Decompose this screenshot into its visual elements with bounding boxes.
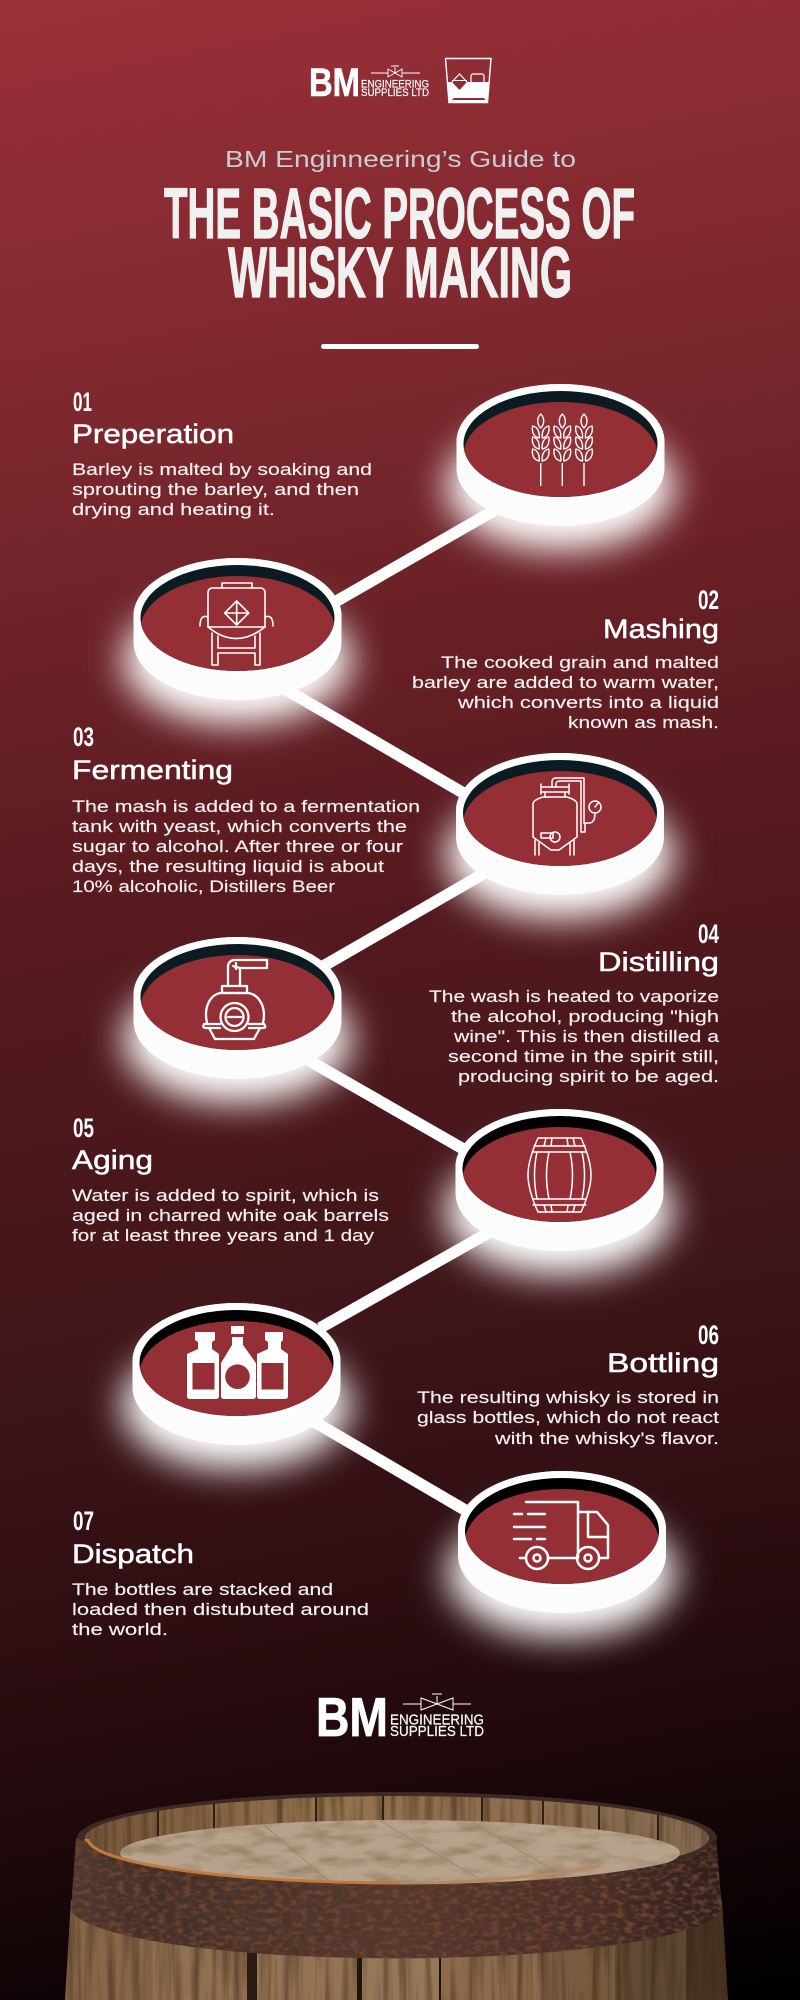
icon: delivery truck — [514, 1502, 608, 1569]
heading: Dispatch — [72, 1539, 194, 1569]
icon: fermentation tank — [533, 778, 601, 855]
disc 3: fermenter — [446, 753, 674, 919]
description: The mash is added to a fermentation — [72, 797, 420, 816]
description — [72, 1186, 389, 1245]
description: The cooked grain and malted — [441, 653, 719, 672]
top logo: BM Engineering Supplies: SUPPLIES LTD — [361, 87, 429, 99]
number: 05 — [73, 1113, 94, 1143]
description — [429, 987, 720, 1086]
number: 06 — [698, 1320, 719, 1350]
disc 7: truck — [448, 1471, 676, 1637]
step 06 text — [417, 1320, 719, 1448]
disc 4: pot still — [124, 937, 352, 1103]
disc 2: mash tun — [124, 558, 352, 724]
barrel rim back — [77, 1792, 717, 1884]
description — [72, 460, 372, 519]
wooden barrel — [65, 1790, 728, 2000]
step 04 text — [429, 919, 720, 1086]
bottom logo: BM Engineering Supplies — [316, 1686, 484, 1748]
top logo: BM Engineering Supplies: BM — [309, 61, 360, 105]
bottom logo: BM Engineering Supplies: ENGINEERING — [390, 1712, 484, 1728]
icon: mash tank — [200, 583, 273, 665]
description: drying and heating it. — [72, 500, 275, 519]
disc 6: bottles — [122, 1303, 350, 1469]
description: barley are added to warm water, — [412, 673, 719, 692]
description: aged in charred white oak barrels — [72, 1206, 389, 1225]
disc 5: barrel — [446, 1109, 674, 1275]
top logo: BM Engineering Supplies: ENGINEERING — [361, 78, 429, 90]
number: 02 — [698, 585, 719, 615]
icon: oak barrel — [528, 1138, 591, 1212]
description: sugar to alcohol. After three or four — [72, 837, 403, 856]
icon: wheat — [532, 414, 592, 486]
description: days, the resulting liquid is about — [72, 857, 384, 876]
heading: Aging — [72, 1145, 153, 1175]
description: second time in the spirit still, — [448, 1047, 719, 1066]
step 07 text — [72, 1506, 369, 1639]
barrel lid — [87, 1820, 680, 1886]
number: 03 — [73, 722, 94, 752]
description: loaded then distubuted around — [72, 1600, 369, 1619]
description: sprouting the barley, and then — [72, 480, 359, 499]
description: known as mash. — [568, 713, 719, 732]
step 02 text — [412, 585, 719, 732]
description: the world. — [72, 1620, 168, 1639]
description: with the whisky's flavor. — [494, 1429, 719, 1448]
heading: Distilling — [598, 947, 719, 977]
barrel iron hoop — [71, 1838, 722, 1958]
description: Water is added to spirit, which is — [72, 1186, 379, 1205]
description — [72, 1580, 369, 1639]
icon: copper still — [203, 960, 267, 1039]
description: the alcohol, producing "high — [451, 1007, 719, 1026]
description: 10% alcoholic, Distillers Beer — [72, 877, 335, 896]
number: 07 — [73, 1506, 94, 1536]
top logo: BM Engineering Supplies — [309, 61, 429, 105]
description: wine". This is then distilled a — [453, 1027, 720, 1046]
description: tank with yeast, which converts the — [72, 817, 407, 836]
number: 04 — [698, 919, 719, 949]
icon: three bottles — [187, 1326, 288, 1399]
description — [412, 653, 719, 732]
title divider — [321, 344, 479, 349]
bottom logo: BM Engineering Supplies: SUPPLIES LTD — [390, 1724, 484, 1740]
description: for at least three years and 1 day — [72, 1226, 375, 1245]
step 05 text — [72, 1113, 389, 1245]
heading: Bottling — [607, 1348, 719, 1378]
description: which converts into a liquid — [457, 693, 719, 712]
number: 01 — [73, 387, 92, 417]
connector lines — [285, 510, 495, 1510]
description: producing spirit to be aged. — [458, 1067, 719, 1086]
disc 1: barley — [446, 384, 674, 550]
description: The bottles are stacked and — [72, 1580, 333, 1599]
subtitle: BM Enginneering’s Guide to — [225, 146, 576, 172]
heading: Fermenting — [72, 755, 233, 785]
barrel staves — [65, 1900, 728, 2000]
description: The resulting whisky is stored in — [417, 1388, 719, 1407]
bottom logo: BM Engineering Supplies: BM — [316, 1686, 388, 1748]
step 01 text — [72, 387, 372, 519]
description — [417, 1388, 719, 1448]
heading: Preperation — [72, 419, 234, 449]
icon: whisky glass — [446, 58, 491, 102]
step 03 text — [72, 722, 420, 896]
heading: Mashing — [603, 614, 719, 644]
description: Barley is malted by soaking and — [72, 460, 372, 479]
description: glass bottles, which do not react — [417, 1408, 719, 1427]
title — [164, 175, 635, 313]
description — [72, 797, 420, 896]
barrel inner wood wall — [85, 1796, 709, 1858]
description: The wash is heated to vaporize — [429, 987, 719, 1006]
